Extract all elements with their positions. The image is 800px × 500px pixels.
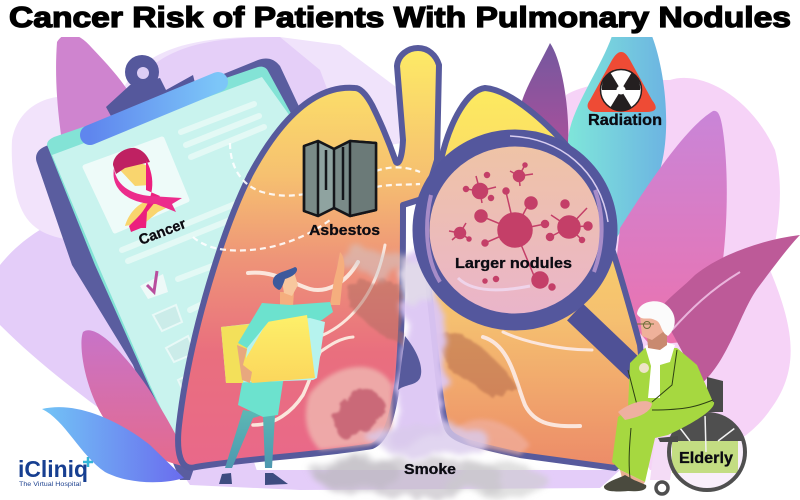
jacket lines	[628, 350, 713, 478]
leaf: pink	[612, 111, 727, 345]
lungs	[178, 48, 650, 468]
ring	[421, 138, 609, 322]
trousers	[612, 402, 714, 482]
label: cancer: Cancer	[137, 216, 189, 249]
shoes	[604, 475, 646, 491]
label: elderly: Elderly	[679, 450, 733, 467]
blouse	[645, 340, 675, 398]
nodules	[449, 163, 592, 290]
dashed connector lines	[193, 143, 420, 250]
chair back	[707, 377, 723, 412]
glasses	[637, 323, 654, 325]
checkboxes	[140, 271, 195, 395]
shirt	[238, 302, 333, 417]
ankle	[620, 470, 645, 486]
leaf: dark purple	[521, 43, 568, 146]
clip bar	[90, 82, 218, 135]
card	[85, 139, 187, 231]
title: Cancer Risk of Patients With Pulmonary Nodules	[9, 2, 791, 34]
figure: person with folder	[219, 252, 344, 485]
hand	[618, 401, 652, 420]
neck and face	[647, 328, 667, 350]
legs	[225, 410, 275, 468]
title band	[0, 0, 800, 37]
smoke	[310, 240, 550, 498]
clip	[106, 55, 198, 118]
hair	[637, 301, 675, 336]
right lung	[429, 88, 650, 468]
wheel	[656, 412, 750, 494]
document lines	[122, 104, 264, 310]
clipboard	[36, 55, 310, 480]
labels	[137, 112, 733, 478]
under seat	[650, 440, 676, 480]
lobe lines	[248, 245, 592, 426]
handle	[575, 312, 640, 374]
leaf: top left	[56, 34, 140, 150]
arm over folder	[238, 303, 272, 348]
raised arm	[330, 252, 344, 305]
hair	[273, 267, 297, 290]
leaf: teal	[568, 36, 666, 248]
jacket	[628, 348, 713, 412]
brooch	[639, 363, 649, 373]
logo: iCliniq	[18, 456, 88, 482]
label: asbestos: Asbestos	[309, 222, 380, 239]
leaf: dark magenta	[660, 235, 800, 385]
leaf: bottom left blue	[42, 407, 184, 482]
label: radiation: Radiation	[588, 112, 662, 129]
neck and head	[280, 292, 294, 306]
leaf: bottom left pink	[81, 330, 192, 468]
icon: asbestos folded sheet	[304, 141, 376, 216]
magnifying glass	[421, 136, 640, 374]
icon: cancer ribbon	[113, 148, 182, 232]
logo: The Virtual Hospital	[19, 482, 81, 488]
shoes	[219, 473, 288, 485]
left lung and trachea	[178, 48, 439, 468]
label: larger nodules: Larger nodules	[455, 256, 572, 272]
label: smoke: Smoke	[404, 462, 456, 478]
icon: radiation	[588, 52, 656, 112]
folder	[221, 318, 325, 383]
lung shadow tumours	[306, 281, 530, 455]
dark lower airway	[398, 336, 421, 390]
figure: elderly woman in wheelchair	[604, 301, 750, 494]
